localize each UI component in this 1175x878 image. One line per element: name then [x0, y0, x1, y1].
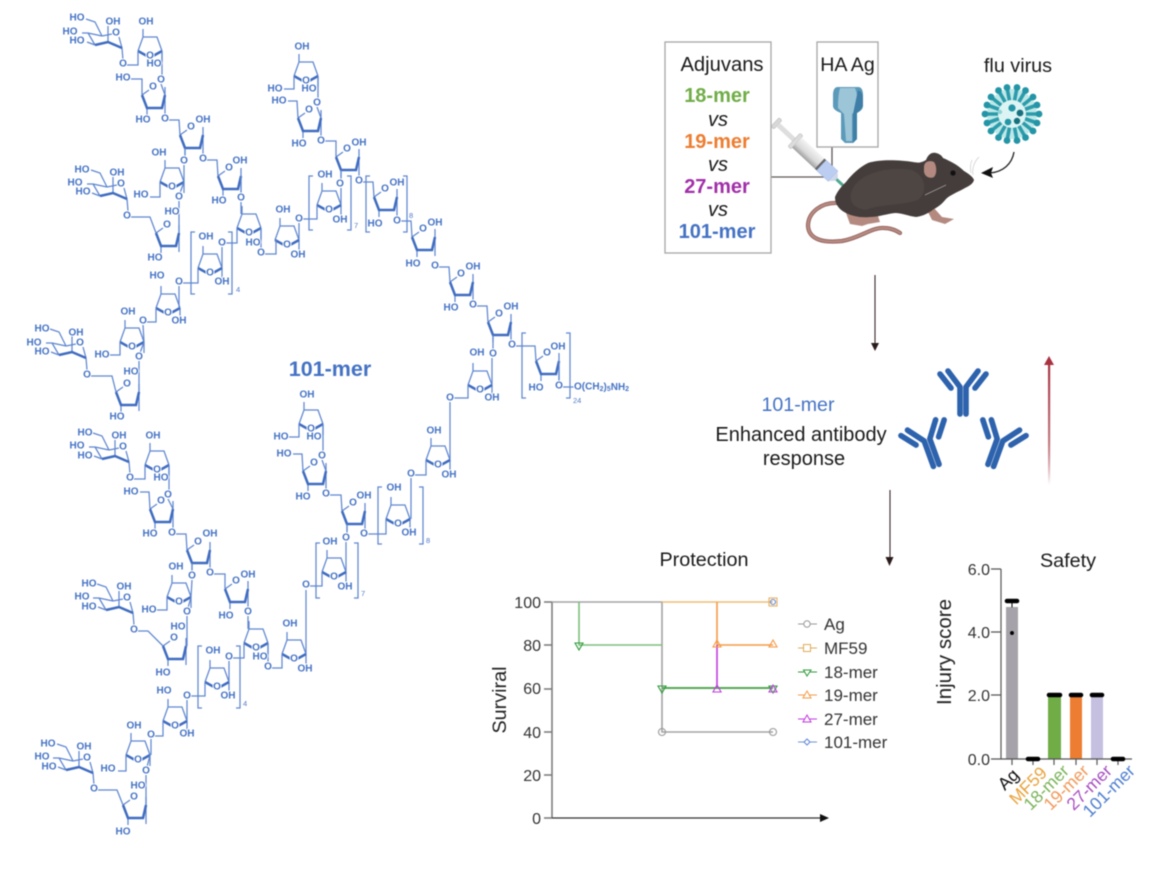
- legend: 101-mer: [824, 733, 888, 752]
- atom labels: upper-right chain: OH: [352, 138, 366, 148]
- atom labels: lower antennae: O: [147, 730, 155, 740]
- atom labels: lower antennae: O: [123, 592, 131, 604]
- atom labels: lower antennae: O: [342, 532, 350, 544]
- atom labels: lower antennae: OH: [402, 528, 416, 538]
- atom labels: lower antennae: O: [119, 442, 127, 452]
- atom labels: lower antennae: OH: [426, 426, 442, 436]
- atom labels: upper-left antennae: O: [180, 156, 188, 166]
- x labels: MF59: [1005, 763, 1051, 808]
- panel: adjuvans box: 18-mer: [684, 85, 750, 107]
- atom labels: upper-left antennae: O: [283, 240, 291, 250]
- atom labels: upper-right chain: O: [476, 384, 484, 396]
- atom labels: lower antennae: HO: [156, 686, 172, 696]
- atom labels: lower antennae: O: [183, 606, 191, 618]
- atom labels: upper-right chain: O: [355, 176, 363, 186]
- y tick labels: 4.0: [968, 625, 990, 642]
- atom labels: upper-left antennae: HO: [150, 270, 165, 282]
- atom labels: lower antennae: O: [142, 766, 150, 776]
- mouse ear: [924, 161, 936, 178]
- molecule name label: 101-mer: [289, 357, 372, 381]
- atom labels: upper-left antennae: HO: [134, 190, 149, 200]
- y tick labels: 20: [523, 768, 541, 785]
- atom labels: upper-left antennae: OH: [276, 204, 290, 216]
- atom labels: upper-left antennae: OH: [110, 168, 124, 178]
- atom labels: upper-left antennae: O: [175, 276, 183, 288]
- atom labels: upper-left antennae: OH: [106, 16, 120, 28]
- axes: [544, 602, 829, 822]
- atom labels: lower antennae: OH: [442, 470, 456, 480]
- repeat counts: 7: [361, 589, 365, 598]
- atom labels: lower antennae: HO: [156, 668, 171, 678]
- atom labels: upper-left antennae: O: [139, 316, 147, 326]
- atom labels: upper-right chain: O: [489, 348, 497, 360]
- atom labels: upper-left antennae: O: [245, 228, 253, 238]
- atom labels: upper-left antennae: HO: [74, 164, 90, 176]
- atom labels: lower antennae: O: [168, 528, 176, 538]
- atom labels: lower antennae: OH: [300, 390, 314, 400]
- connector lines from boxes to syringe: [771, 147, 832, 177]
- atom labels: upper-left antennae: O: [157, 74, 165, 86]
- atom labels: lower antennae: O: [134, 754, 142, 766]
- atom labels: lower antennae: OH: [180, 728, 194, 740]
- atom labels: lower antennae: O: [90, 784, 98, 794]
- atom labels: upper-left antennae: O: [295, 214, 303, 224]
- atom labels: upper-left antennae: O: [199, 154, 207, 164]
- data points and error caps: [1007, 601, 1123, 759]
- atom labels: upper-right chain: O: [457, 268, 465, 280]
- atom labels: upper-right chain: O: [543, 348, 551, 358]
- atom labels: lower antennae: [34, 390, 456, 838]
- atom labels: upper-left antennae: O: [225, 162, 233, 174]
- atom labels: upper-right chain: HO: [302, 84, 317, 94]
- bars: [1006, 607, 1103, 759]
- atom labels: upper-left antennae: HO: [26, 338, 42, 348]
- antibody left: [900, 417, 958, 473]
- atom labels: lower antennae: O: [290, 654, 298, 664]
- atom labels: lower antennae: O: [194, 536, 202, 548]
- y tick labels: 60: [523, 681, 541, 698]
- y tick labels: 0.0: [968, 752, 990, 769]
- atom labels: upper-left antennae: O: [128, 342, 136, 352]
- mouse whiskers: [925, 157, 979, 195]
- atom labels: upper-right chain: OH: [484, 392, 500, 404]
- x labels: Ag: [994, 765, 1023, 794]
- legend: 18-mer: [824, 663, 878, 682]
- atom labels: lower antennae: O: [244, 606, 252, 618]
- atom labels: lower antennae: O: [322, 488, 330, 500]
- y tick labels: 0: [532, 811, 541, 828]
- atom labels: lower antennae: HO: [100, 764, 116, 774]
- atom labels: lower antennae: O: [126, 472, 134, 484]
- atom labels: upper-right chain: 2: [625, 386, 629, 392]
- antibody top: [940, 371, 986, 414]
- atom labels: upper-right chain: O: [305, 104, 313, 116]
- x labels: 19-mer: [1039, 761, 1093, 814]
- atom labels: upper-left antennae: O: [119, 58, 127, 70]
- arrow: virus challenge to mouse: [981, 152, 1014, 178]
- atom labels: lower antennae: O: [310, 458, 318, 468]
- atom labels: lower antennae: OH: [338, 582, 352, 592]
- atom labels: upper-left antennae: HO: [148, 252, 163, 264]
- atom labels: lower antennae: HO: [306, 432, 322, 442]
- flu virus label: flu virus: [984, 55, 1052, 77]
- atom labels: upper-right chain: HO: [528, 382, 544, 394]
- atom labels: upper-left antennae: HO: [124, 366, 139, 378]
- atom labels: upper-right chain: O: [555, 380, 563, 392]
- atom labels: upper-right chain: O: [393, 216, 401, 226]
- atom labels: lower antennae: HO: [142, 528, 158, 540]
- atom labels: upper-left antennae: HO: [246, 238, 261, 248]
- atom labels: upper-left antennae: O: [161, 114, 169, 124]
- atom labels: upper-right chain: OH: [504, 302, 518, 312]
- y axis title: Injury score: [933, 599, 956, 705]
- atom labels: lower antennae: OH: [356, 490, 372, 502]
- atom labels: lower antennae: HO: [42, 762, 57, 772]
- text: 101-mer enhanced antibody response: Enhanced antibody: [715, 424, 887, 446]
- atom labels: lower antennae: O: [349, 498, 357, 508]
- atom labels: upper-left antennae: OH: [172, 316, 186, 326]
- atom labels: lower antennae: O: [130, 624, 138, 636]
- atom labels: lower antennae: O: [360, 528, 368, 540]
- repeat counts: 8: [426, 536, 430, 545]
- atom labels: upper-left antennae: HO: [70, 12, 85, 24]
- atom labels: upper-right chain: O(CH: [574, 382, 600, 392]
- atom labels: lower antennae: HO: [274, 432, 289, 442]
- survival curves: [552, 602, 773, 732]
- y tick labels: 40: [523, 725, 541, 742]
- atom labels: upper-right chain: OH: [390, 178, 404, 188]
- arrow: antibody response to outcomes: [886, 490, 894, 566]
- atom labels: upper-right chain: OH: [550, 342, 566, 352]
- atom labels: upper-right chain: HO: [292, 138, 307, 150]
- atom labels: lower antennae: OH: [322, 536, 338, 548]
- repeat counts: 8: [409, 211, 413, 220]
- atom labels: upper-right chain: 5: [607, 386, 611, 392]
- atom labels: lower antennae: OH: [112, 430, 126, 442]
- atom labels: upper-left antennae: O: [168, 182, 176, 192]
- atom labels: upper-left antennae: HO: [110, 412, 125, 422]
- repeat counts: 7: [354, 221, 358, 230]
- atom labels: lower antennae: OH: [202, 528, 218, 540]
- atom labels: upper-right chain: O: [495, 308, 503, 320]
- atom labels: upper-right chain: O: [317, 136, 325, 146]
- curve markers: [575, 598, 777, 736]
- atom labels: lower antennae: HO: [276, 448, 292, 460]
- antibody right: [969, 417, 1027, 473]
- legend: 27-mer: [824, 710, 878, 729]
- atom labels: lower antennae: OH: [126, 720, 142, 732]
- mouse body: [835, 153, 974, 217]
- atom labels: upper-left antennae: OH: [152, 148, 166, 158]
- atom labels: upper-left antennae: O: [187, 122, 195, 132]
- atom labels: upper-right chain: O: [419, 224, 427, 234]
- atom labels: lower antennae: O: [394, 518, 402, 530]
- y tick labels: 80: [523, 638, 541, 655]
- atom labels: upper-left antennae: HO: [34, 346, 50, 358]
- icon: flu virus particle: [982, 84, 1042, 144]
- atom labels: upper-left antennae: O: [146, 50, 154, 62]
- atom labels: lower antennae: O: [183, 690, 191, 702]
- atom labels: lower antennae: O: [153, 464, 161, 476]
- panel: HA antigen box: [817, 42, 878, 147]
- atom labels: upper-right chain: O: [336, 178, 344, 190]
- atom labels: upper-left antennae: HO: [62, 26, 78, 38]
- text: 101-mer enhanced antibody response: [715, 394, 887, 470]
- legend: Ag: [824, 615, 845, 634]
- atom labels: upper-left antennae: HO: [116, 72, 131, 84]
- atom labels: lower antennae: HO: [154, 472, 169, 484]
- heading: safety: Safety: [1040, 550, 1096, 572]
- atom labels: upper-right chain: HO: [368, 218, 383, 230]
- panel: protection survival chart: [489, 549, 888, 828]
- polymer brackets: [191, 176, 570, 708]
- x labels: 27-mer: [1062, 761, 1116, 814]
- atom labels: upper-left antennae: O: [164, 308, 172, 318]
- atom labels: upper-left antennae: O: [257, 248, 265, 258]
- atom labels: upper-left antennae: O: [123, 210, 131, 222]
- atom labels: upper-right chain: HO: [406, 258, 421, 270]
- y tick labels: [514, 595, 541, 828]
- axes and ticks: [991, 569, 1132, 765]
- atom labels: upper-right chain: O: [431, 260, 439, 272]
- atom labels: upper-right chain: OH: [294, 42, 310, 52]
- atom labels: lower antennae: O: [302, 580, 310, 590]
- atom labels: lower antennae: HO: [218, 610, 234, 622]
- atom labels: lower antennae: HO: [116, 826, 131, 838]
- atom labels: upper-left antennae: O: [175, 192, 183, 202]
- atom labels: lower antennae: O: [130, 792, 138, 802]
- atom labels: upper-left antennae: HO: [70, 36, 85, 46]
- atom labels: upper-right chain: OH: [318, 170, 332, 180]
- atom labels: lower antennae: OH: [282, 618, 298, 630]
- atom labels: upper-left antennae: HO: [136, 114, 151, 126]
- atom labels: upper-left antennae: O: [149, 82, 157, 92]
- atom labels: lower antennae: O: [264, 662, 272, 672]
- atom labels: upper-left antennae: O: [83, 370, 91, 380]
- heading: protection: Protection: [659, 549, 749, 571]
- atom labels: lower antennae: O: [318, 450, 326, 462]
- atom labels: lower antennae: HO: [34, 752, 50, 762]
- atom labels: upper-left antennae: HO: [164, 206, 180, 218]
- atom labels: upper-right chain: [268, 42, 629, 404]
- repeat counts: 24: [573, 396, 581, 405]
- atom labels: lower antennae: OH: [146, 430, 160, 442]
- arrow: immunisation to antibody response: [871, 275, 879, 351]
- atom labels: upper-left antennae: O: [218, 238, 226, 248]
- atom labels: upper-right chain: OH: [470, 348, 484, 358]
- atom labels: lower antennae: HO: [40, 738, 56, 750]
- atom labels: lower antennae: O: [83, 752, 91, 764]
- panel: adjuvans box: vs: [708, 199, 728, 221]
- chemical structure: 101-mer glycan: [26, 12, 629, 838]
- atom labels: lower antennae: O: [232, 576, 240, 586]
- text: 101-mer enhanced antibody response: response: [763, 448, 845, 470]
- atom labels: lower antennae: OH: [220, 690, 236, 702]
- x labels: 101-mer: [1079, 761, 1139, 821]
- x labels: [994, 761, 1139, 821]
- sugar rings: furanose and mannose units: [46, 19, 559, 825]
- atom labels: lower antennae: O: [170, 632, 178, 644]
- atom labels: upper-right chain: O: [381, 184, 389, 194]
- mouse front foot: [926, 208, 954, 224]
- atom labels: upper-left antennae: OH: [68, 328, 84, 338]
- atom labels: upper-right chain: O: [469, 300, 477, 310]
- atom labels: upper-right chain: HO: [268, 84, 283, 94]
- glycosidic bonds: [91, 51, 574, 805]
- atom labels: lower antennae: HO: [252, 652, 268, 662]
- atom labels: lower antennae: HO: [82, 578, 97, 590]
- atom labels: upper-right chain: O: [313, 98, 321, 108]
- legend: MF59: [824, 639, 867, 658]
- atom labels: lower antennae: O: [213, 682, 221, 692]
- atom labels: upper-right chain: ): [603, 382, 607, 392]
- atom labels: lower antennae: OH: [298, 664, 312, 674]
- atom labels: lower antennae: O: [307, 424, 315, 434]
- atom labels: upper-left antennae: HO: [212, 196, 227, 206]
- atom labels: lower antennae: HO: [82, 602, 97, 612]
- atom labels: upper-right chain: O: [446, 392, 454, 404]
- icon: mouse: [808, 153, 979, 242]
- x labels: 18-mer: [1019, 761, 1073, 814]
- atom labels: upper-left antennae: OH: [196, 114, 210, 126]
- atom labels: upper-right chain: O: [302, 76, 310, 86]
- atom labels: lower antennae: OH: [206, 646, 220, 656]
- atom labels: lower antennae: O: [171, 720, 179, 732]
- atom labels: upper-left antennae: [26, 12, 306, 422]
- atom labels: lower antennae: O: [407, 468, 415, 480]
- atom labels: upper-right chain: OH: [466, 262, 480, 272]
- atom labels: lower antennae: OH: [116, 582, 132, 592]
- atom labels: upper-left antennae: O: [163, 220, 171, 230]
- y tick labels: 6.0: [968, 562, 990, 579]
- y axis title: Surviral: [489, 666, 511, 734]
- y tick labels: 100: [514, 595, 541, 612]
- arrow: red increase arrow: [1044, 356, 1054, 485]
- atom labels: upper-right chain: O: [508, 340, 516, 350]
- atom labels: upper-right chain: 2: [600, 386, 604, 392]
- atom labels: upper-left antennae: OH: [198, 232, 214, 242]
- atom labels: upper-left antennae: O: [112, 28, 120, 38]
- atom labels: lower antennae: OH: [386, 482, 402, 494]
- atom labels: lower antennae: OH: [76, 742, 92, 752]
- mouse tail: [808, 203, 900, 242]
- legend: [798, 615, 888, 752]
- atom labels: upper-left antennae: OH: [214, 276, 230, 288]
- atom labels: lower antennae: O: [434, 460, 442, 470]
- atom labels: lower antennae: HO: [142, 604, 157, 616]
- y tick labels: 2.0: [968, 688, 990, 705]
- atom labels: lower antennae: OH: [240, 570, 256, 580]
- atom labels: lower antennae: O: [157, 496, 165, 506]
- legend: 19-mer: [824, 686, 878, 705]
- atom labels: lower antennae: HO: [70, 440, 85, 452]
- atom labels: lower antennae: O: [206, 568, 214, 578]
- atom labels: upper-right chain: O: [325, 204, 333, 216]
- atom labels: upper-right chain: HO: [444, 302, 459, 314]
- atom labels: upper-left antennae: OH: [290, 250, 306, 260]
- atom labels: upper-left antennae: OH: [232, 156, 248, 166]
- atom labels: upper-left antennae: HO: [34, 324, 50, 334]
- atom labels: upper-left antennae: O: [135, 352, 143, 362]
- atom labels: upper-left antennae: OH: [138, 16, 154, 28]
- atom labels: lower antennae: HO: [78, 428, 93, 438]
- text: 101-mer enhanced antibody response: 101-mer: [762, 394, 835, 416]
- atom labels: upper-right chain: OH: [332, 214, 348, 226]
- panel: adjuvans box: [665, 42, 771, 253]
- atom labels: upper-left antennae: HO: [94, 350, 110, 360]
- panel: adjuvans box: 101-mer: [679, 221, 756, 243]
- atom labels: upper-left antennae: HO: [76, 186, 91, 198]
- icon: antibodies: [900, 371, 1027, 473]
- panel: HA antigen box: HA Ag: [820, 54, 875, 76]
- mouse eye: [950, 170, 956, 176]
- repeat counts: [236, 211, 581, 708]
- atom labels: lower antennae: O: [188, 570, 196, 582]
- panel: safety bar chart: [933, 550, 1139, 821]
- panel: adjuvans box: vs: [708, 109, 728, 131]
- repeat counts: 4: [243, 699, 247, 708]
- icon: HA antigen protein: [833, 87, 863, 143]
- atom labels: upper-left antennae: HO: [68, 178, 83, 188]
- atom labels: lower antennae: HO: [130, 780, 146, 792]
- atom labels: upper-right chain: O: [343, 144, 351, 154]
- atom labels: lower antennae: O: [175, 596, 183, 608]
- atom labels: upper-left antennae: O: [237, 192, 245, 204]
- atom labels: upper-left antennae: O: [76, 338, 84, 348]
- atom labels: upper-left antennae: OH: [120, 306, 136, 318]
- panel: adjuvans box: Adjuvans: [680, 54, 764, 76]
- atom labels: lower antennae: HO: [74, 592, 90, 602]
- atom labels: lower antennae: HO: [78, 450, 93, 462]
- atom labels: lower antennae: O: [252, 642, 260, 654]
- y tick labels: [968, 562, 990, 769]
- atom labels: lower antennae: OH: [168, 562, 184, 572]
- panel: adjuvans box: vs: [708, 154, 728, 176]
- atom labels: lower antennae: O: [330, 572, 338, 582]
- atom labels: lower antennae: HO: [170, 622, 186, 632]
- atom labels: lower antennae: O: [225, 652, 233, 662]
- atom labels: upper-left antennae: O: [117, 178, 125, 190]
- atom labels: lower antennae: O: [164, 490, 172, 500]
- atom labels: upper-right chain: OH: [428, 218, 442, 228]
- atom labels: upper-right chain: NH: [611, 382, 625, 392]
- atom labels: lower antennae: HO: [124, 486, 139, 498]
- mouse hind foot: [846, 212, 880, 226]
- panel: adjuvans box: 27-mer: [684, 176, 750, 198]
- atom labels: upper-left antennae: O: [206, 268, 214, 278]
- atom labels: lower antennae: HO: [296, 492, 311, 502]
- atom labels: upper-left antennae: HO: [146, 58, 162, 70]
- panel: adjuvans box: 19-mer: [684, 131, 750, 153]
- atom labels: upper-right chain: HO: [272, 96, 287, 106]
- icon: syringe: [769, 115, 850, 193]
- atom labels: upper-left antennae: O: [123, 378, 131, 390]
- repeat counts: 4: [236, 285, 240, 294]
